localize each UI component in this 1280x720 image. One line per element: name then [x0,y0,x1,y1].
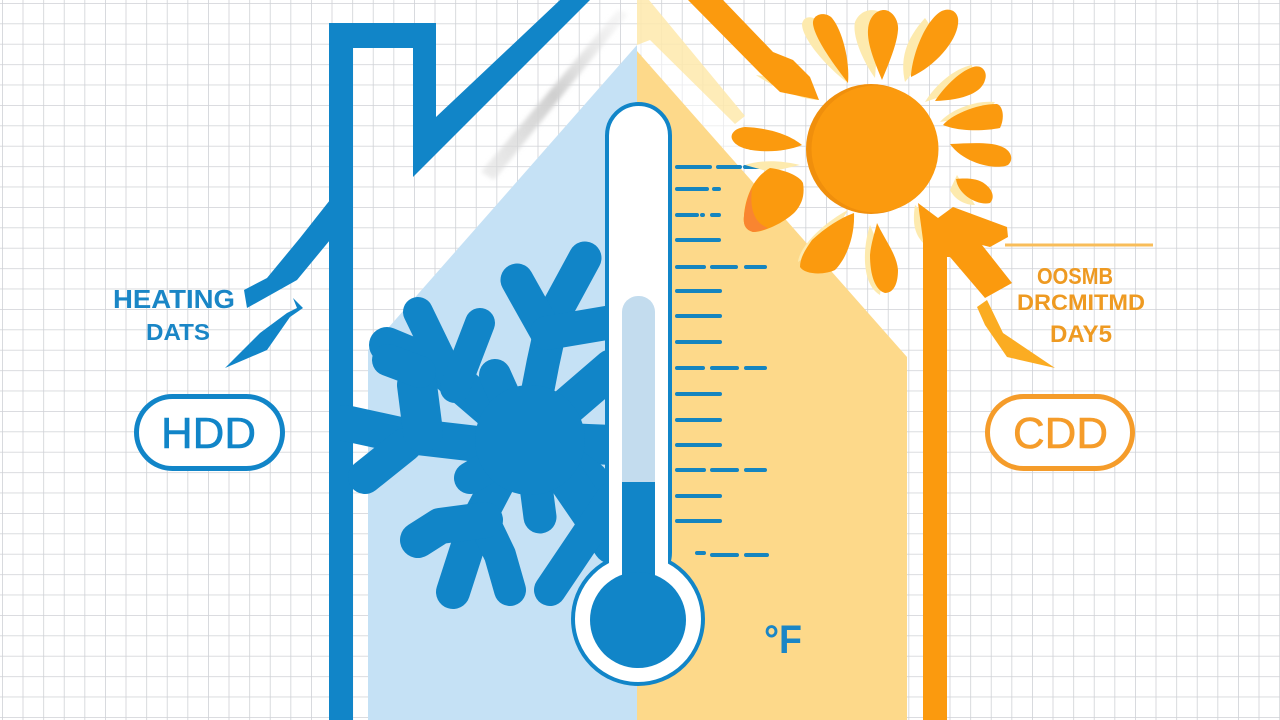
CDD badge [988,396,1132,468]
thermometer white tube joint [609,530,668,580]
roof highlight shadow [481,10,628,180]
panel: warm side of house [637,0,907,720]
right roof: orange [688,0,819,100]
thermometer empty channel [622,296,655,536]
heating days label [113,284,235,345]
roof and eave highlights [756,75,935,245]
panel: cold side of house [368,45,637,720]
heating days label: DATS [146,319,210,345]
sun ray highlights [745,10,995,295]
cooling days label: OOSMB [1037,263,1113,289]
sun ray shading [744,188,768,232]
thermometer outer tube [607,104,670,584]
left eave accent stroke [225,298,303,368]
cooling days rule [1005,244,1153,246]
degree fahrenheit label: °F [764,618,802,662]
thermometer mercury bulb [590,572,686,668]
left eave: blue [244,200,330,308]
icon: sun [732,10,1011,295]
CDD badge: CDD [1013,409,1108,458]
right eave accent stroke [977,300,1055,368]
right wall and eave: orange [918,203,1012,720]
thermometer [573,104,703,684]
cooling days label: DRCMITMD [1017,290,1145,315]
cooling days label: DAY5 [1050,321,1112,348]
sun disc shadow [806,84,936,214]
house outline: blue wall, chimney and roof [329,0,590,720]
icon: snowflake [345,258,612,592]
HDD badge [136,396,282,468]
thermometer scale ticks [677,167,767,555]
sun rays [732,10,1011,293]
HDD badge: HDD [161,409,256,458]
thermometer bulb ring [573,554,703,684]
heating days label: HEATING [113,284,235,314]
sun disc [812,86,938,212]
cooling days label [1017,263,1145,348]
thermometer mercury column [622,482,655,592]
